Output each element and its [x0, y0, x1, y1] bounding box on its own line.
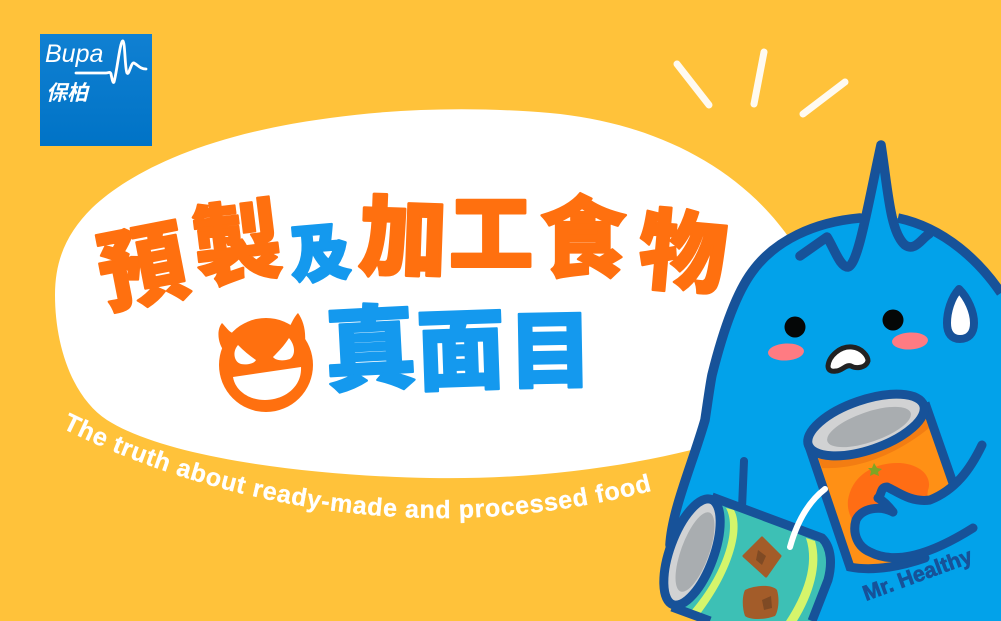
body	[670, 145, 1001, 621]
title line 1: 預	[87, 190, 197, 332]
arm line	[742, 461, 744, 508]
title line 1: 加	[357, 167, 450, 297]
title line 1: 食	[539, 169, 627, 296]
icon: devil face	[218, 313, 313, 412]
title line 1: 物	[634, 180, 733, 314]
logo: Bupa	[40, 34, 152, 146]
title line 2: 面	[414, 280, 507, 410]
subtitle on a curve: The truth about ready-made and processed food	[66, 412, 651, 524]
sweat drop	[947, 289, 974, 339]
title line 2: 目	[507, 284, 593, 407]
green can	[652, 492, 830, 621]
white speech blob	[55, 109, 792, 478]
title line 1: 及	[285, 202, 354, 296]
character: Mr. Healthy	[652, 145, 1001, 621]
title line 1: 工	[449, 168, 533, 289]
title line 1	[87, 167, 733, 332]
mouth	[828, 347, 868, 371]
logo: Bupa: 保柏	[46, 82, 90, 105]
crest spike	[800, 145, 929, 267]
Mr. Healthy label: Mr. Healthy	[860, 544, 976, 606]
white highlight stroke	[790, 489, 825, 547]
title line 2: 真	[321, 274, 419, 411]
logo: Bupa: Bupa	[45, 40, 103, 68]
title line 1: 製	[185, 169, 288, 306]
surprise rays	[677, 52, 845, 114]
hand gripping the can	[855, 445, 982, 558]
orange can	[800, 382, 956, 569]
cheeks	[768, 343, 804, 361]
title line 2	[321, 274, 593, 411]
eyes	[784, 316, 806, 338]
